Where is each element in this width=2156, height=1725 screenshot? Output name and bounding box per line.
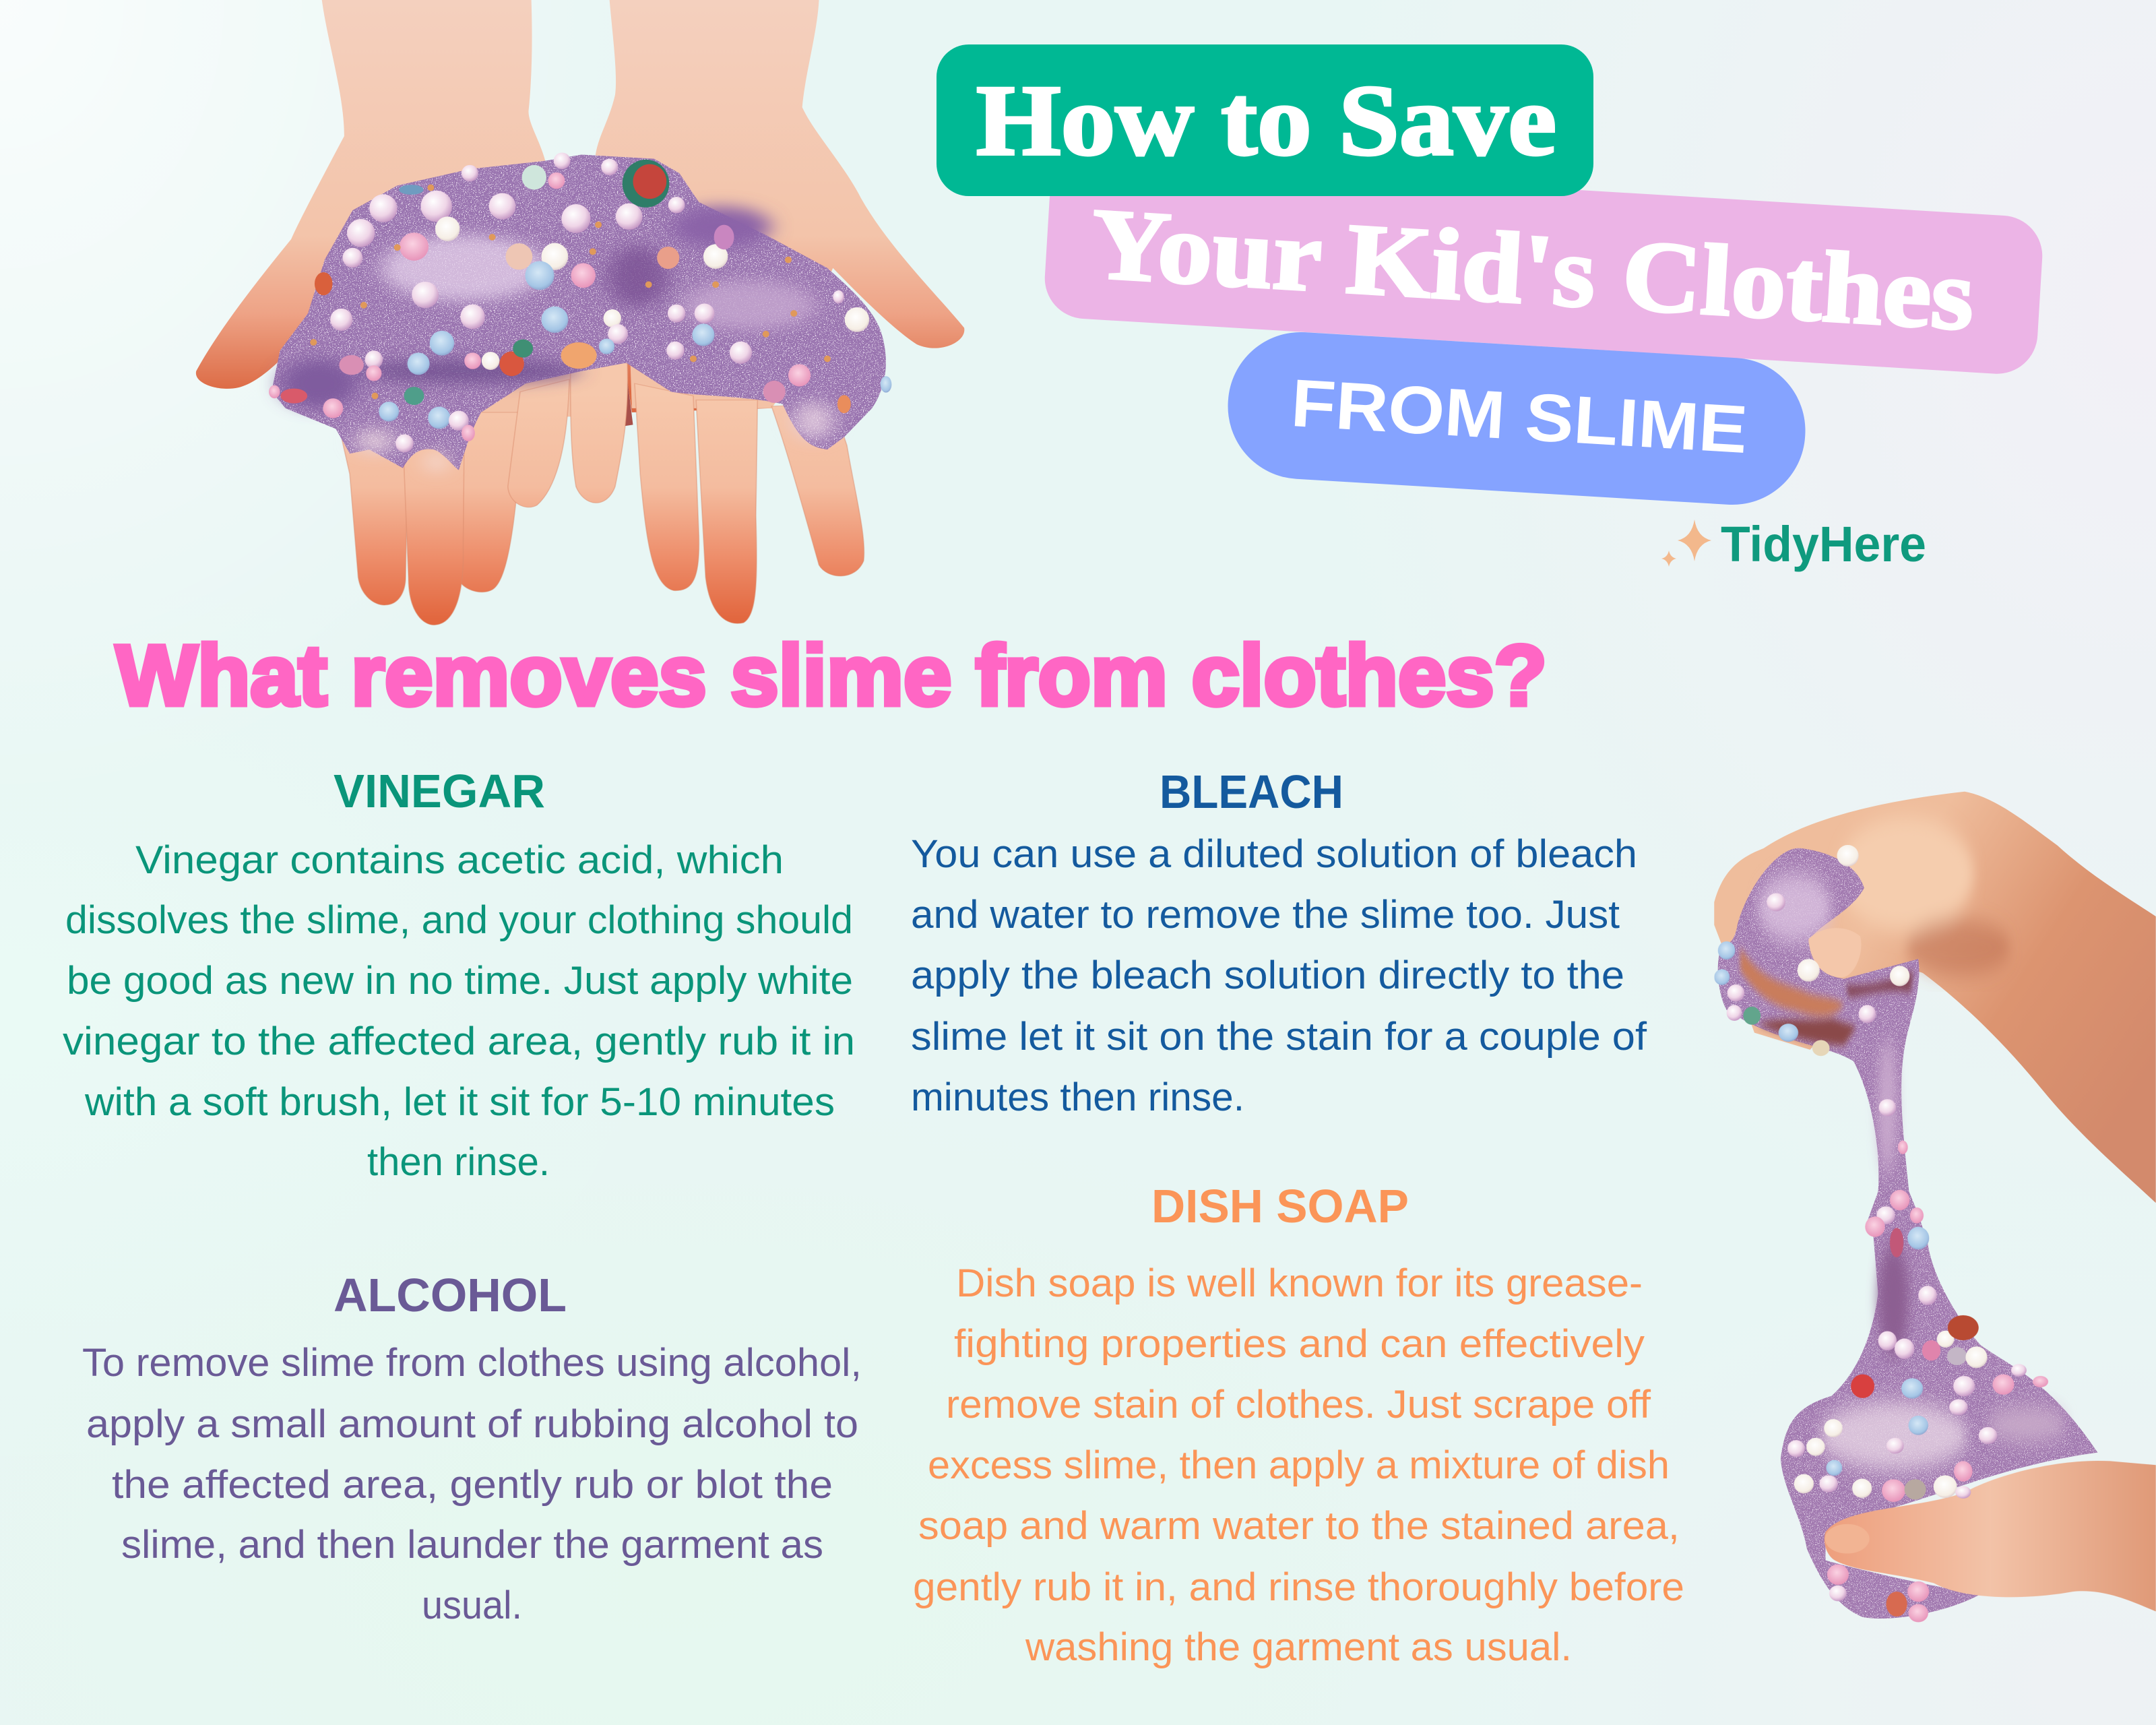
- text: vinegar instructions: Vinegar contains acetic acid, which: [135, 838, 784, 882]
- right arm and palm: [596, 0, 964, 412]
- title line: FROM SLIME: FROM SLIME: [1289, 365, 1750, 468]
- text: dish soap instructions: washing the garment as usual.: [1025, 1625, 1572, 1669]
- panel: alcohol: [82, 1269, 862, 1627]
- gap shadow between hands: [619, 379, 633, 427]
- text: alcohol instructions: apply a small amount of rubbing alcohol to: [86, 1402, 858, 1446]
- title pill: your kid's clothes background: [1042, 158, 2045, 376]
- title line: How to Save: How to Save: [976, 65, 1556, 177]
- text: dish soap instructions: excess slime, then apply a mixture of dish: [928, 1443, 1670, 1487]
- slime shading: [1758, 874, 2067, 1470]
- thumb nail: [1808, 928, 1861, 977]
- text: bleach instructions: apply the bleach solution directly to the: [911, 953, 1624, 997]
- text: dish soap instructions: fighting properties and can effectively: [954, 1322, 1645, 1366]
- hand highlight and wrist shadow: [1838, 817, 2011, 976]
- text: bleach instructions: [911, 832, 1647, 1119]
- text: vinegar instructions: dissolves the slime, and your clothing should: [65, 898, 853, 942]
- photo: hands stretching slime: [1714, 792, 2156, 1622]
- slime shading and glitter: [280, 206, 833, 472]
- text: alcohol instructions: slime, and then launder the garment as: [121, 1523, 823, 1567]
- glitter flecks: [310, 185, 831, 399]
- text: dish soap instructions: soap and warm water to the stained area,: [918, 1504, 1680, 1548]
- heading: vinegar: VINEGAR: [334, 765, 545, 817]
- heading: alcohol: ALCOHOL: [334, 1269, 567, 1321]
- text: vinegar instructions: with a soft brush, let it sit for 5-10 minutes: [84, 1080, 835, 1124]
- panel: dish soap: [913, 1180, 1684, 1669]
- text: bleach instructions: and water to remove the slime too. Just: [911, 893, 1620, 937]
- wordmark: TidyHere: [1721, 516, 1926, 572]
- photo: child's hands holding purple slime: [196, 0, 964, 625]
- panel: bleach: [911, 765, 1647, 1119]
- slime beads: [269, 152, 891, 452]
- lower thumb nail: [1825, 1524, 1870, 1554]
- text: alcohol instructions: the affected area, gently rub or blot the: [112, 1463, 833, 1507]
- icon: sparkles: [1661, 520, 1711, 567]
- fingers: [339, 363, 864, 625]
- lower hand: [1825, 1461, 2156, 1611]
- title pill: how to save background: [937, 44, 1593, 196]
- text: alcohol instructions: [82, 1341, 862, 1627]
- text: bleach instructions: You can use a diluted solution of bleach: [911, 832, 1637, 876]
- slime beads: [1714, 845, 2048, 1622]
- text: dish soap instructions: gently rub it in, and rinse thoroughly before: [913, 1565, 1684, 1609]
- heading: bleach: BLEACH: [1160, 765, 1343, 818]
- text: bleach instructions: minutes then rinse.: [911, 1075, 1244, 1119]
- title pill: from slime background: [1224, 328, 1810, 509]
- text: alcohol instructions: usual.: [422, 1583, 522, 1627]
- heading: dish soap: DISH SOAP: [1151, 1180, 1409, 1232]
- slime strand and blobs: [1718, 848, 2097, 1619]
- text: vinegar instructions: [63, 838, 855, 1184]
- title line: Your Kid's Clothes: Your Kid's Clothes: [1088, 187, 1977, 352]
- text: alcohol instructions: To remove slime from clothes using alcohol,: [82, 1341, 862, 1385]
- text: dish soap instructions: [913, 1261, 1684, 1669]
- palm skin beneath slime: [325, 321, 833, 416]
- text: dish soap instructions: Dish soap is well known for its grease-: [956, 1261, 1643, 1305]
- logo: TidyHere: [1661, 516, 1926, 572]
- text: vinegar instructions: then rinse.: [367, 1140, 550, 1184]
- upper arm and hand: [1714, 792, 2156, 1203]
- panel: vinegar: [63, 765, 855, 1184]
- text: vinegar instructions: vinegar to the affected area, gently rub it in: [63, 1020, 855, 1063]
- watermelon bead: [623, 160, 669, 208]
- heading: what removes slime: What removes slime from clothes?: [116, 627, 1547, 723]
- slime blob: [272, 155, 886, 470]
- text: bleach instructions: slime let it sit on the stain for a couple of: [911, 1015, 1647, 1059]
- text: dish soap instructions: remove stain of clothes. Just scrape off: [946, 1383, 1651, 1426]
- text: vinegar instructions: be good as new in no time. Just apply white: [67, 959, 853, 1003]
- left arm and palm: [196, 0, 581, 416]
- gripping fingers over slime: [1740, 947, 1913, 1045]
